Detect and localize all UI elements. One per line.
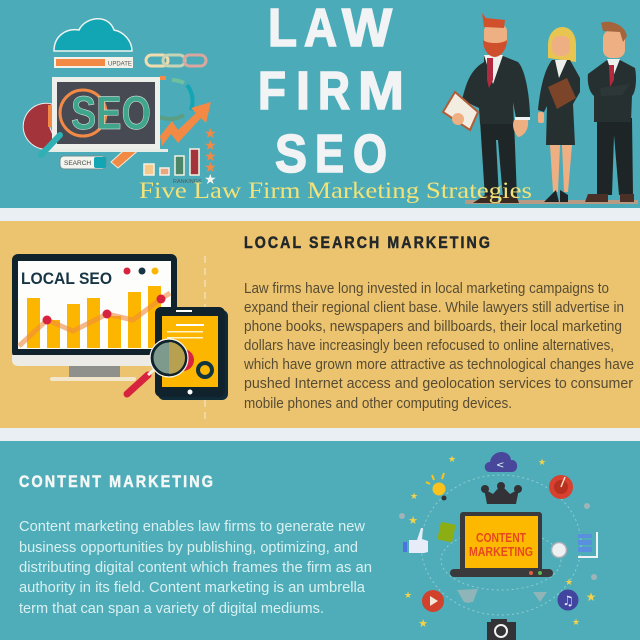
panel: local search marketing background bbox=[0, 221, 640, 428]
text: content marketing on laptop: MARKETING bbox=[469, 545, 533, 559]
jacket bbox=[462, 56, 530, 124]
jacket and skirt bbox=[538, 60, 580, 145]
title: M bbox=[358, 61, 404, 121]
icon: scattered stars: ★ bbox=[404, 591, 412, 601]
icon: scattered stars: ★ bbox=[586, 590, 596, 604]
icon: light bulb bbox=[426, 473, 446, 500]
crossed arms bbox=[600, 84, 630, 96]
icon: document bbox=[578, 532, 597, 557]
icon: rating stars: ★ bbox=[204, 160, 217, 176]
connector ring bbox=[421, 475, 581, 615]
icon: update progress bar: UPDATE bbox=[108, 62, 132, 68]
icon: wifi bbox=[533, 592, 547, 602]
illustration: three lawyers bbox=[443, 13, 638, 204]
icon: target bbox=[549, 475, 573, 499]
icon: scattered stars bbox=[404, 455, 596, 630]
icon: magnifier handle bbox=[41, 135, 60, 155]
icon: rating stars bbox=[204, 126, 217, 188]
legs bbox=[550, 145, 572, 192]
icon: scattered stars: ★ bbox=[408, 514, 418, 527]
icon: green card bbox=[437, 522, 456, 542]
icon: scattered stars: ★ bbox=[410, 492, 418, 502]
icon: growth arrow bbox=[160, 102, 211, 146]
icon: rating stars: ★ bbox=[204, 126, 217, 142]
text block: content marketing: business opportunities by publishing, optimizing, and bbox=[19, 539, 358, 556]
title: I bbox=[296, 61, 310, 121]
clipboard hand bbox=[452, 113, 464, 125]
figure: bearded man bbox=[443, 13, 530, 203]
icon: globe bbox=[552, 542, 566, 558]
jacket bbox=[588, 60, 636, 122]
text block: local search marketing: mobile phones and other computing devices. bbox=[244, 395, 512, 412]
text block: content marketing: distributing digital content which frames the firm as an bbox=[19, 559, 372, 576]
icon: search box: SEARCH bbox=[64, 160, 91, 167]
panel: header background bbox=[0, 0, 640, 208]
chart: trend line bbox=[19, 293, 170, 346]
heading: local search marketing: LOCAL SEARCH MARKETING bbox=[244, 233, 492, 252]
icon: small grey gears bbox=[399, 503, 597, 580]
text block: local search marketing bbox=[243, 280, 634, 412]
title bbox=[258, 0, 404, 184]
figure: man with crossed arms bbox=[585, 22, 636, 202]
divider band: upper bbox=[0, 208, 640, 221]
trousers bbox=[480, 120, 517, 198]
title: R bbox=[318, 61, 350, 121]
panel: content marketing background bbox=[0, 441, 640, 640]
legend dots bbox=[124, 268, 158, 274]
dashed divider bbox=[204, 256, 206, 420]
icon: crown bbox=[481, 482, 522, 504]
face bbox=[603, 30, 625, 58]
icon: monitor bbox=[12, 254, 177, 381]
shirt bbox=[607, 59, 620, 77]
title: F bbox=[258, 61, 286, 121]
face bbox=[484, 25, 507, 47]
tie bbox=[487, 58, 493, 88]
icon: rating stars: ★ bbox=[204, 149, 217, 165]
icon: shopping cart bbox=[457, 589, 478, 603]
hair bbox=[548, 27, 576, 62]
text: content marketing on laptop bbox=[469, 531, 533, 559]
text block: content marketing: authority in its field. Content marketing is an umbrella bbox=[19, 579, 366, 596]
title: E bbox=[315, 124, 344, 184]
subtitle: Five Law Firm Marketing Strategies bbox=[139, 178, 532, 203]
icon: update progress bar bbox=[54, 57, 133, 68]
icon: scattered stars: ★ bbox=[538, 458, 546, 468]
icon: play button bbox=[422, 590, 444, 612]
icon: rating stars: ★ bbox=[204, 138, 217, 154]
chart: trend points bbox=[42, 294, 166, 324]
hair bbox=[482, 13, 505, 28]
clipboard bbox=[443, 92, 478, 130]
title: S bbox=[275, 124, 307, 184]
icon: thumbs up bbox=[403, 528, 428, 553]
chart: pie chart bbox=[23, 103, 58, 149]
icon: cloud bbox=[54, 19, 132, 51]
icon: laptop bbox=[41, 77, 168, 155]
icon: dark gear bbox=[198, 363, 212, 377]
icon: scattered stars: ★ bbox=[418, 617, 428, 630]
ground shadow bbox=[465, 200, 638, 204]
text: rankings label: RANKINGS bbox=[173, 179, 202, 185]
face bbox=[552, 36, 570, 56]
text block: content marketing: term that can span a variety of digital mediums. bbox=[19, 600, 324, 617]
text: content marketing on laptop: CONTENT bbox=[476, 531, 526, 545]
shoes bbox=[585, 194, 634, 202]
icon: magnifier ring bbox=[60, 90, 106, 136]
beard bbox=[483, 40, 507, 57]
text: SEO on laptop: SEO bbox=[71, 86, 151, 139]
illustration: content marketing laptop and icons bbox=[399, 452, 597, 640]
icon: music note: ♫ bbox=[562, 594, 574, 609]
icon: scattered stars: ★ bbox=[565, 578, 573, 588]
icon: share cloud bbox=[485, 452, 517, 472]
folder bbox=[548, 78, 576, 109]
shirt bbox=[484, 55, 503, 84]
shoes bbox=[544, 190, 568, 202]
icon: red gear bbox=[172, 349, 194, 371]
icon: scattered stars: ★ bbox=[448, 455, 456, 465]
divider band: lower bbox=[0, 428, 640, 441]
hair bbox=[601, 22, 627, 42]
text: LOCAL SEO: LOCAL SEO bbox=[21, 270, 112, 288]
hand bbox=[538, 112, 544, 123]
icon: scattered stars: ★ bbox=[572, 618, 580, 628]
icon: tablet bbox=[155, 307, 228, 400]
shirt bbox=[555, 60, 567, 78]
illustration: local SEO monitor and tablet bbox=[12, 254, 228, 420]
icon: rating stars: ★ bbox=[204, 172, 217, 188]
illustration: SEO graphic bbox=[23, 19, 217, 188]
tie bbox=[609, 65, 614, 87]
hand bbox=[513, 120, 528, 137]
title: O bbox=[353, 124, 387, 184]
heading: content marketing: CONTENT MARKETING bbox=[19, 472, 215, 491]
chart: donut ring bbox=[160, 78, 193, 119]
shoes bbox=[473, 195, 519, 203]
icon: camera bbox=[487, 619, 516, 640]
trousers bbox=[597, 118, 633, 195]
icon: share cloud: < bbox=[496, 460, 504, 471]
icon: chain links bbox=[146, 55, 206, 66]
chart: bars bbox=[27, 286, 161, 348]
text block: local search marketing: Law firms have long invested in local marketing campaigns to bbox=[244, 280, 609, 297]
figure: blonde woman bbox=[538, 27, 580, 202]
icon: music note bbox=[558, 590, 578, 610]
icon: laptop bbox=[450, 512, 553, 577]
icon: pencil bbox=[111, 142, 141, 168]
chart: rankings bars bbox=[144, 149, 199, 175]
text block: content marketing bbox=[19, 518, 372, 617]
icon: orange pie slice bbox=[48, 105, 54, 127]
icon: search box bbox=[60, 156, 106, 169]
icon: magnifier bbox=[127, 339, 188, 394]
text block: content marketing: Content marketing enables law firms to generate new bbox=[19, 518, 365, 535]
cuff bbox=[515, 117, 530, 120]
